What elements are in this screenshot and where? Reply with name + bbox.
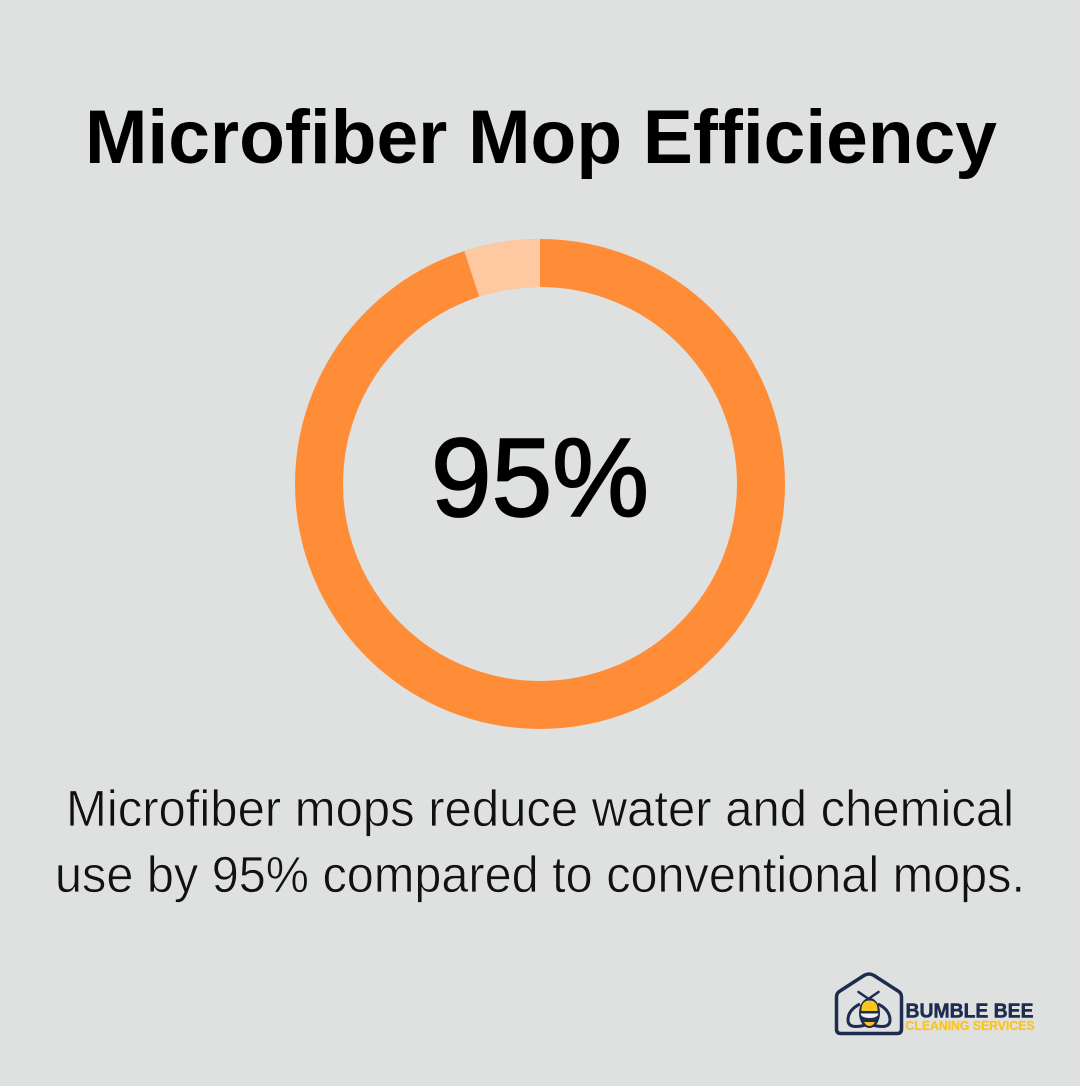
donut chart: 95%	[319, 263, 761, 705]
description text: use by 95% compared to conventional mops.	[55, 846, 1025, 903]
logo name: BUMBLE BEE	[906, 1000, 1034, 1022]
logo tagline: CLEANING SERVICES	[906, 1019, 1034, 1033]
icon: bee	[848, 992, 890, 1028]
icon: house outline	[836, 974, 902, 1034]
description text	[55, 780, 1025, 903]
donut centre value: 95%	[431, 416, 649, 540]
title: Microfiber Mop Efficiency	[85, 95, 997, 180]
logo: Bumble Bee Cleaning Services	[836, 974, 1034, 1034]
description text: Microfiber mops reduce water and chemical	[66, 780, 1014, 837]
